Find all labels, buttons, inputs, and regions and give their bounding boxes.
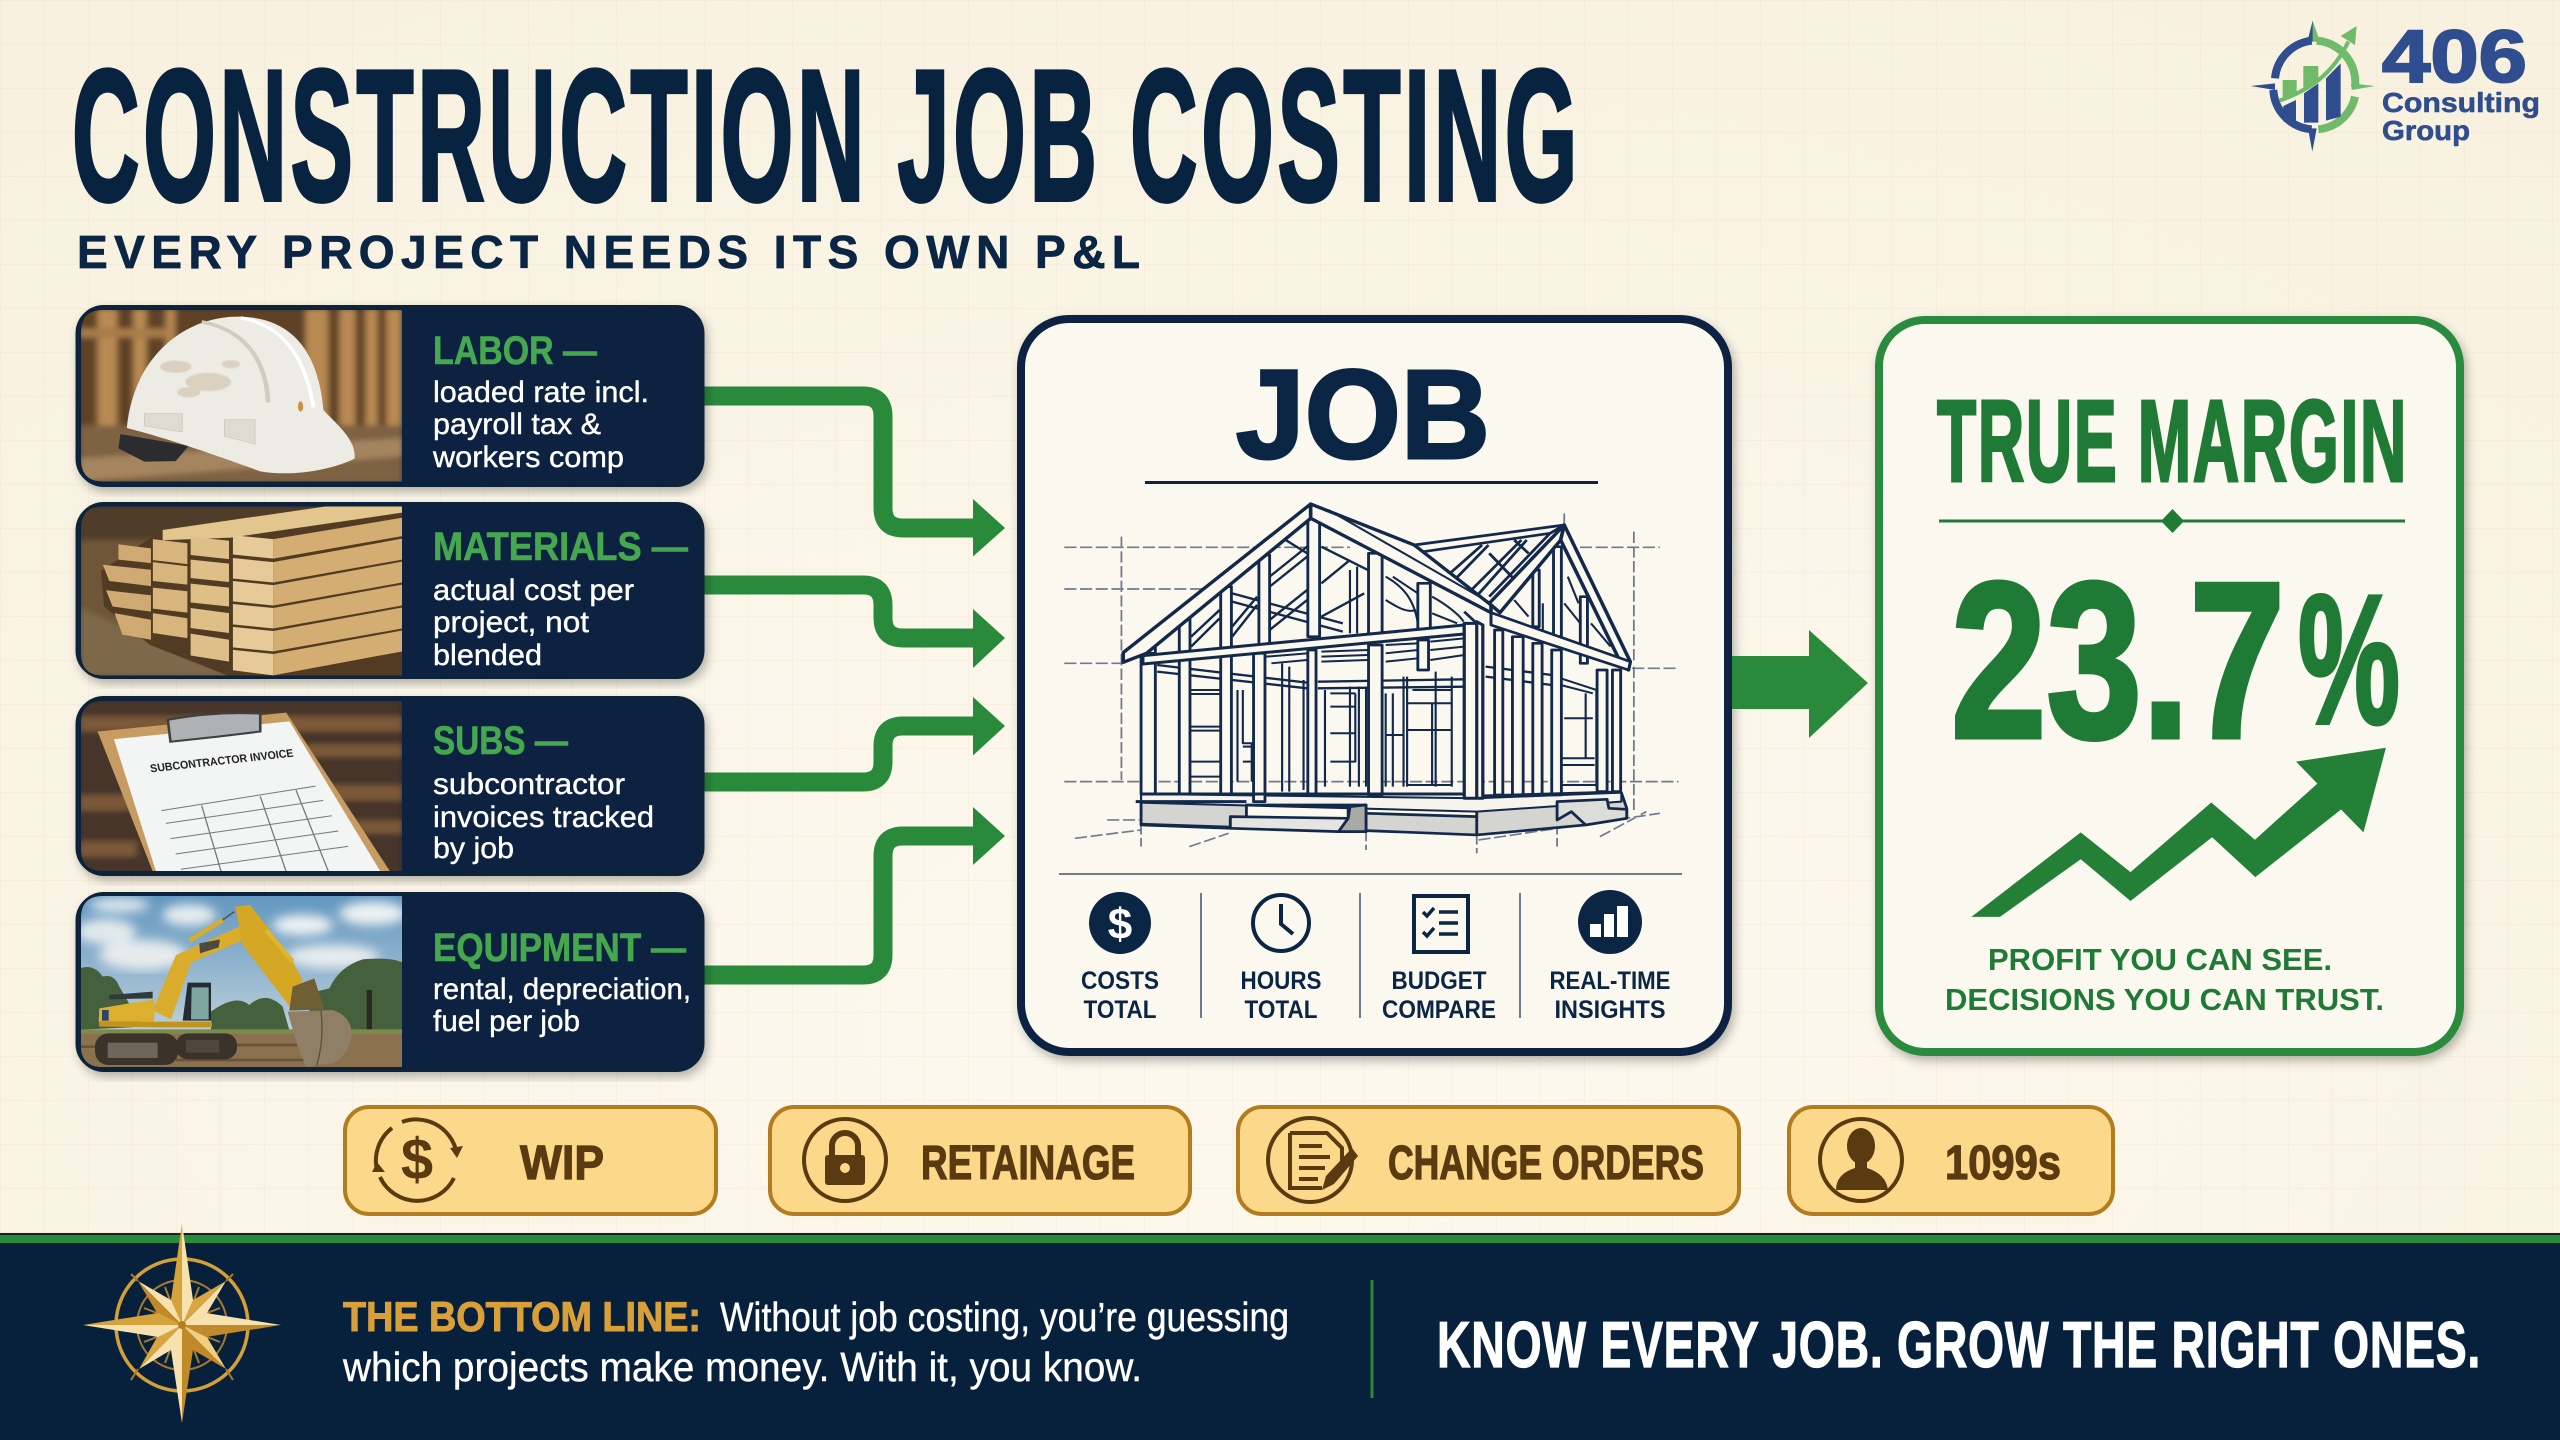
panel: subs xyxy=(78,698,702,874)
text: materials line 3: blended xyxy=(433,639,542,672)
heading rule with diamond xyxy=(1939,509,2405,533)
chip: WIP: WIP xyxy=(520,1137,604,1190)
label: equipment: EQUIPMENT — xyxy=(433,926,686,970)
divider xyxy=(1059,873,1682,875)
chip: retainage xyxy=(770,1107,1190,1214)
stat: percent sign: % xyxy=(2298,556,2400,762)
text: materials line 2: project, not xyxy=(433,606,590,639)
photo: subcontractor invoice clipboard xyxy=(78,698,403,874)
arrow: materials xyxy=(704,585,1005,668)
text: equipment line 2: fuel per job xyxy=(433,1005,580,1038)
heading rule xyxy=(1145,481,1598,484)
panel: materials xyxy=(78,504,702,678)
chip: retainage: RETAINAGE xyxy=(921,1137,1135,1190)
photo: hard hat xyxy=(78,308,403,484)
icon: gold compass rose xyxy=(83,1223,281,1423)
text: subs line 2: invoices tracked xyxy=(433,801,654,834)
stat: costs total: TOTAL xyxy=(1084,996,1156,1024)
heading: JOB: JOB xyxy=(1236,344,1490,485)
text: subs line 1: subcontractor xyxy=(433,768,625,801)
label: subs: SUBS — xyxy=(433,719,568,763)
arrow: job to true margin xyxy=(1732,630,1868,738)
stat: budget compare: COMPARE xyxy=(1382,996,1496,1024)
logo icon: compass with growth bars xyxy=(2251,21,2375,152)
panel: equipment xyxy=(76,890,702,1070)
footer band xyxy=(0,1223,2560,1440)
stat dividers xyxy=(1201,893,1520,1018)
arrow: equipment xyxy=(704,807,1005,975)
label: materials: MATERIALS — xyxy=(433,525,688,569)
arrow: subs xyxy=(704,697,1005,782)
text: materials line 1: actual cost per xyxy=(433,574,634,607)
chip: WIP: $ xyxy=(401,1127,433,1192)
stat: hours total: TOTAL xyxy=(1244,996,1318,1024)
divider xyxy=(1370,1280,1374,1398)
subtitle: EVERY PROJECT NEEDS ITS OWN P&L xyxy=(77,226,1140,278)
logo number: 406 xyxy=(2382,15,2527,98)
logo name line 2: Group xyxy=(2382,115,2470,146)
tagline line 2: DECISIONS YOU CAN TRUST. xyxy=(1945,982,2384,1017)
photo: lumber stack xyxy=(78,504,403,678)
panel: true margin xyxy=(1879,320,2460,1052)
photo: excavator xyxy=(76,890,406,1070)
panel: labor xyxy=(78,308,702,484)
arrows: cost categories into job xyxy=(704,396,1005,975)
chip: change orders xyxy=(1238,1107,1739,1214)
chip: 1099s xyxy=(1789,1107,2113,1214)
chip: change orders: CHANGE ORDERS xyxy=(1388,1137,1704,1190)
bottom line text 2: which projects make money. With it, you know. xyxy=(342,1344,1142,1390)
text: labor line 3: workers comp xyxy=(432,441,624,474)
arrow: labor xyxy=(704,396,1005,556)
text: labor line 2: payroll tax & xyxy=(433,408,601,441)
chart: upward arrow xyxy=(1971,748,2386,917)
logo name line 1: Consulting xyxy=(2382,87,2540,118)
photo: subcontractor invoice clipboard: SUBCONTRACTOR INVOICE xyxy=(149,746,295,775)
chip: WIP xyxy=(345,1107,716,1214)
panel: job xyxy=(1021,319,1728,1052)
stat: costs total: $ xyxy=(1108,900,1132,949)
stat: hours total: HOURS xyxy=(1240,967,1322,995)
label: labor: LABOR — xyxy=(433,329,597,373)
illustration: framed house blueprint xyxy=(1064,504,1679,853)
bottom line lead: THE BOTTOM LINE: xyxy=(343,1293,701,1340)
stat: real-time insights: INSIGHTS xyxy=(1554,996,1666,1024)
bottom line text 1: Without job costing, you’re guessing xyxy=(720,1294,1289,1340)
chip: 1099s: 1099s xyxy=(1945,1137,2061,1190)
text: labor line 1: loaded rate incl. xyxy=(433,376,649,409)
stat: hours total xyxy=(1240,895,1322,1024)
logo: 406 Consulting Group xyxy=(2251,15,2540,152)
stat: costs total xyxy=(1081,892,1159,1024)
stat: budget compare: BUDGET xyxy=(1392,967,1486,995)
text: equipment line 1: rental, depreciation, xyxy=(433,973,691,1006)
stat: 23.7: 23.7 xyxy=(1951,537,2285,785)
stat: costs total: COSTS xyxy=(1081,967,1159,995)
text: subs line 3: by job xyxy=(433,832,514,865)
tagline line 1: PROFIT YOU CAN SEE. xyxy=(1988,942,2332,977)
stat: real-time insights: REAL-TIME xyxy=(1550,967,1670,995)
stat: real-time insights xyxy=(1550,890,1670,1024)
stat: budget compare xyxy=(1382,896,1496,1024)
